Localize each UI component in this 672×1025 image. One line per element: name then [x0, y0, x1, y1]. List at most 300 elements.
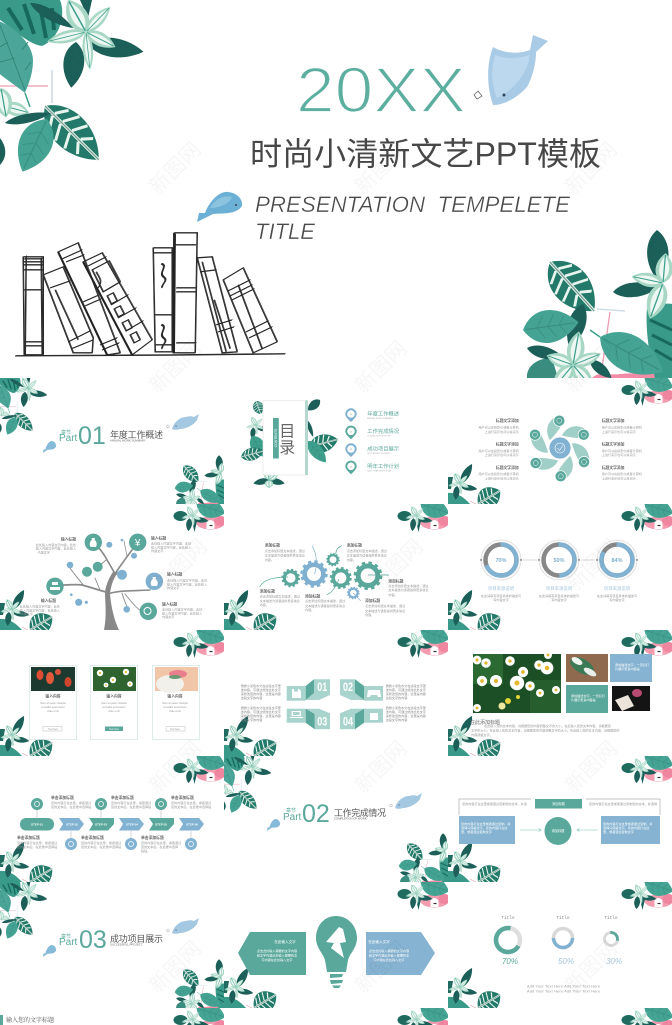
- tile text: 微微小墨色水分在这段文字里: [386, 683, 426, 688]
- leaves: bottom left: [0, 714, 58, 765]
- donut 30%: [604, 916, 622, 966]
- tile text: 来修改您的内容，这里是内容: [241, 691, 281, 696]
- labels: 输入内容文字内容，此处输入: [167, 581, 207, 586]
- ring 84%: [596, 540, 638, 580]
- labels: 输入内容文字内容，此处输入: [162, 610, 202, 615]
- panel: photo collage slide: [448, 630, 672, 756]
- right text column: 上进行演示也可以将演示: [602, 429, 636, 434]
- left teal arrow box: 在此输入文字: [274, 939, 296, 944]
- panel: cropped bottom row slide 2: [398, 1008, 448, 1025]
- labels: 输入标题: [61, 536, 76, 542]
- left teal arrow box: 和文字内容此处输入需要的文: [257, 952, 297, 958]
- panel: 3D numbered tiles slide: [224, 630, 448, 756]
- labels: 文本描述为读者提供更多信息: [305, 603, 345, 608]
- caption lines: [527, 984, 600, 994]
- leaves: bottom left: [0, 840, 58, 891]
- ring captions: 在此请填写项目具体的描述可: [539, 593, 579, 598]
- photo: white tulips: [566, 653, 608, 682]
- timeline text: 您的文本后，在此框中选择粘: [171, 804, 211, 809]
- body copy: [470, 719, 620, 737]
- labels: 内容文字: [38, 549, 50, 554]
- pin item 3: SUCCESSFUL PROJECT: [367, 453, 391, 455]
- center ellipse: 添加标题: [552, 828, 565, 833]
- pin item 1: 01: [350, 414, 353, 416]
- timeline text: 您的内容打在这里，或者通过: [141, 840, 181, 845]
- panel: step timeline slide: [0, 756, 224, 882]
- tile text: 这段文字的内容: [386, 695, 407, 700]
- panel: Part 03 section slide: [0, 882, 224, 1008]
- left teal arrow box: 字内容在此处输入文字: [262, 957, 292, 962]
- card 3: convallis amet lorem: [163, 705, 187, 709]
- leaves: bottom left: [448, 714, 506, 765]
- timeline text: 您的内容打在这里，或者通过: [111, 800, 151, 805]
- timeline steps: STEP 05: [155, 822, 167, 826]
- right blue arrow box: 和文字内容此处输入需要的文: [369, 952, 409, 958]
- pin item 2: COMPLETION OF WORK: [367, 435, 391, 437]
- timeline text: 粘贴。: [141, 848, 150, 853]
- timeline text: 单击添加标题: [171, 795, 194, 800]
- icon: fish large: [390, 793, 422, 809]
- labels: 点击添加标题文本描述，通过: [347, 548, 387, 553]
- panel: progress rings slide: [448, 504, 672, 630]
- section label: 章节: [61, 933, 71, 940]
- right text column: 标题文字添加: [602, 442, 625, 446]
- left text column: 上进行演示也可以将演示: [485, 452, 519, 457]
- contents card: [263, 400, 308, 475]
- icon: light bulb: [316, 916, 357, 988]
- labels: 输入标题: [151, 536, 166, 540]
- labels: 输入内容文字内容，此处输入: [36, 546, 76, 551]
- tile 04: 04: [343, 715, 353, 729]
- slide title: 输入您的文字标题: [6, 1016, 54, 1024]
- right text column: 上进行演示也可以将演示: [602, 452, 636, 457]
- icon: small watercolor fish: [197, 192, 242, 222]
- right text column: 标题文字添加: [602, 418, 625, 423]
- ring captions: 项目来源说明: [604, 585, 631, 592]
- card 2: Test here: [109, 728, 120, 731]
- left text column: 标题文字添加: [496, 418, 519, 423]
- right text column: [602, 418, 643, 480]
- swirl flower chart: [527, 415, 593, 482]
- section title: 工作完成情况: [334, 807, 386, 818]
- timeline text: 您的内容打在这里，或者通过: [171, 800, 211, 805]
- panel: swirl flower diagram slide: [448, 378, 672, 504]
- labels: 文本描述为读者提供更多信息: [265, 552, 305, 558]
- panel: cropped bottom row slide 3: [622, 1008, 672, 1025]
- card 1: Nam at quam volutpat: [40, 701, 66, 705]
- caption lines: Add Your Text Here Add Your Text Here: [527, 984, 600, 988]
- panel: Part 01 section slide: [0, 378, 224, 504]
- leaves: bottom right: [174, 959, 225, 1013]
- tile text: [241, 683, 426, 722]
- pin item 2: [345, 426, 400, 439]
- left text column: 上进行演示也可以将演示: [485, 475, 519, 480]
- labels: 输入标题: [167, 572, 182, 576]
- right blue arrow box: [366, 932, 435, 975]
- donut 30%: 30%: [606, 957, 622, 966]
- donut 50%: [554, 916, 574, 966]
- labels: 内容。: [365, 612, 374, 617]
- pin item 3: 03: [350, 449, 353, 451]
- part word: Part: [59, 937, 78, 948]
- leaves: top right: [174, 621, 228, 658]
- leaves: bottom right: [174, 455, 225, 509]
- card 3: 输入内容: [167, 694, 183, 698]
- leaves: top right: [398, 495, 452, 532]
- pin item 1: ANNUAL WORK SUMMARY: [367, 417, 394, 420]
- tile text: 述内容，可通过修改此处文字: [386, 709, 426, 714]
- leaves: top right: [622, 369, 672, 406]
- leaves: bottom left: [224, 966, 282, 1017]
- panel: gears slide: [224, 504, 448, 630]
- leaves: top right: [174, 495, 228, 532]
- labels: 内容。: [260, 602, 269, 607]
- labels: 点击添加标题文本描述，通过: [265, 548, 305, 553]
- right text column: 上进行演示也可以将演示: [602, 475, 636, 480]
- leaves: top right: [622, 621, 672, 658]
- left blue box: 里，或者通过复制文字: [461, 829, 492, 834]
- title year 20XX: 20XX: [296, 54, 466, 126]
- labels: 输入内容文字内容，此处输入: [20, 607, 60, 612]
- labels: 添加标题: [305, 593, 320, 598]
- left blue box: 您的内容打在这里或者通过复制，并: [461, 821, 510, 826]
- panel: tree diagram slide: [0, 504, 224, 630]
- caption lines: Add Your Text Here Add Your Text Here: [527, 990, 600, 994]
- card 2: 输入内容: [106, 694, 122, 698]
- left text column: 标题文字添加: [496, 465, 519, 470]
- labels: 此处输入内容文字内容，此处: [20, 604, 60, 609]
- leaves: top right: [398, 873, 452, 910]
- icon: fish small: [43, 441, 56, 453]
- card 1: convallis amet lorem: [41, 705, 65, 709]
- heading 目录: 录: [279, 439, 295, 457]
- labels: 此处输入内容文字内容，此处: [162, 607, 202, 612]
- card 1: vitae ut sit: [47, 709, 59, 713]
- main Chinese title: 时尚小清新文艺PPT模板: [250, 136, 601, 172]
- labels: 输入标题: [162, 602, 177, 606]
- tree chart: [46, 534, 163, 630]
- leaves: top right: [622, 495, 672, 532]
- labels: 文本描述为读者提供更多信息: [365, 608, 405, 613]
- labels: 内容。: [347, 557, 356, 562]
- text box: teal: 片展示更多内容是: [571, 697, 596, 702]
- heading 目录: 目: [279, 423, 295, 440]
- leaves: top left: [222, 754, 272, 815]
- watermarks: 新图网: [563, 535, 624, 596]
- timeline text: 您的内容打在这里，或者通过: [17, 840, 57, 845]
- leaves: top left cluster: [0, 0, 145, 178]
- labels: 添加标题: [388, 578, 404, 583]
- tile 01: [287, 679, 330, 701]
- right text column: 标题文字添加: [602, 465, 625, 470]
- pin item 3: [345, 443, 399, 457]
- labels: 内容文字: [162, 614, 174, 619]
- ring captions: 写内容文字: [493, 597, 509, 602]
- icon: fish small: [267, 819, 280, 831]
- timeline text: [17, 795, 211, 853]
- donut 30%: Title: [604, 916, 618, 921]
- right blue arrow box: 点击此处输入需要的文字内容: [369, 948, 409, 953]
- watermarks: 新图网: [351, 737, 412, 798]
- body copy: 文字的大小。在此输入您的文本内容，请根据您的内容调整文字的大小。在此输入您的文本内容，请根据您的: [471, 728, 620, 732]
- watermarks: 新图网: [145, 737, 206, 798]
- watermarks: 新图网: [151, 535, 212, 596]
- watermarks: 新图网: [561, 737, 622, 798]
- tile text: 述内容，可通过修改此处文字: [386, 687, 426, 692]
- center ellipse: [544, 817, 572, 845]
- timeline steps: STEP 04: [126, 822, 138, 826]
- arrows: [520, 828, 598, 832]
- timeline steps: STEP 02: [66, 822, 78, 826]
- pin item 1: [345, 408, 400, 422]
- labels: 文本描述为读者提供更多信息: [347, 552, 387, 558]
- text box: blue: [610, 654, 652, 682]
- donut 50%: Title: [556, 916, 570, 921]
- labels: [260, 542, 429, 617]
- tile text: 来修改您的内容，这里是内容: [241, 713, 281, 718]
- left text column: 上进行演示也可以将演示: [485, 429, 519, 434]
- labels: 内容。: [265, 557, 274, 562]
- timeline text: 您的文本后，在此框中选择粘: [17, 844, 57, 849]
- text box: teal: [566, 685, 608, 713]
- card 2: [90, 666, 138, 740]
- body copy: 在此输入您的文本内容，请根据您的内容调整文字的大小。在此输入您的文本内容，请根据您: [484, 723, 611, 728]
- frame lines and top text: [459, 799, 660, 815]
- pin item 4: NEXT YEAR WORK PLAN: [367, 469, 392, 472]
- ring captions: [481, 585, 637, 602]
- text box: teal: 添加描述文字，一页幻灯: [571, 693, 605, 698]
- pin item 1: 年度工作概述: [367, 410, 400, 418]
- right text column: 用户可以在投影仪或者计算机: [602, 471, 643, 476]
- section label: 章节: [286, 807, 296, 814]
- tile text: 这段文字的内容: [241, 695, 262, 700]
- leaves: top right: [174, 747, 228, 784]
- left text column: 用户可以在投影仪或者计算机: [478, 471, 520, 476]
- tile text: 来修改您的内容，这里是内容: [386, 713, 426, 718]
- section subtitle: ANNUAL WORK SUMMARY: [110, 438, 146, 442]
- right blue arrow box: 在此输入文字: [368, 939, 390, 944]
- ring 70%: 70%: [495, 558, 507, 564]
- heading 目录: [279, 423, 295, 457]
- photo: dark bouquet: [612, 686, 650, 711]
- ring captions: 在此请填写项目具体的描述可: [481, 593, 521, 598]
- watermarks: 新图网: [145, 138, 206, 199]
- part word: Part: [283, 812, 302, 823]
- labels: 文本描述为读者提供更多信息: [260, 598, 300, 603]
- labels: 内容。: [305, 607, 314, 612]
- timeline steps: STEP 01: [31, 822, 43, 826]
- watermarks: 新图网: [367, 535, 428, 596]
- panel: flowchart slide: [448, 756, 672, 882]
- tile 02: [340, 679, 383, 701]
- timeline text: 单击添加标题: [111, 795, 134, 800]
- leaves: bottom left: [224, 714, 282, 765]
- section number: 03: [79, 926, 107, 954]
- body copy: 在此添加标题: [470, 719, 500, 726]
- icon: fish small: [43, 945, 56, 957]
- donut 70%: 70%: [502, 957, 518, 966]
- panel: three cards slide: [0, 630, 224, 756]
- donut 70%: [492, 916, 524, 966]
- panel: cropped bottom row slide 1: [0, 1008, 224, 1025]
- top title box: [535, 799, 582, 808]
- left text column: 标题文字添加: [496, 442, 519, 446]
- labels: 点击添加标题文本描述，通过: [388, 583, 429, 588]
- timeline text: 您的文本后，在此框中选择粘: [51, 804, 91, 809]
- labels: 此处输入内容文字内容，此处: [36, 542, 76, 547]
- card 2: vitae ut sit: [108, 709, 120, 713]
- left text column: [478, 418, 520, 480]
- leaves: bottom left: [448, 462, 506, 513]
- ring 84%: 84%: [611, 558, 623, 564]
- leaves: bottom left: [448, 966, 506, 1017]
- watermarks: 新图网: [351, 138, 412, 199]
- timeline text: 您的文本后，在此框中选择粘: [81, 844, 121, 849]
- pin item 3: 成功项目展示: [367, 445, 399, 453]
- tile text: 微微小墨色水分在这段文字里: [241, 705, 281, 710]
- watermarks: 新图网: [351, 337, 412, 398]
- labels: 内容文字: [21, 611, 33, 616]
- tree chart: ¥: [134, 538, 141, 549]
- panel: Part 02 section slide: [224, 756, 448, 882]
- timeline text: 单击添加标题: [17, 835, 40, 840]
- labels: 文本描述为读者提供更多信息: [388, 587, 429, 592]
- watermarks: 新图网: [145, 337, 206, 398]
- section number: 02: [302, 800, 330, 828]
- timeline text: 您的内容打在这里，或者通过: [51, 800, 91, 805]
- leaves: top left: [0, 376, 48, 437]
- section title: 年度工作概述: [110, 429, 163, 440]
- subtitle line one: PRESENTATION TEMPELETE: [255, 192, 570, 217]
- card 1: Test here: [48, 728, 59, 731]
- left teal arrow box: 点击此处输入需要的文字内容: [257, 948, 297, 953]
- icon: fish large: [166, 918, 199, 934]
- tile text: 这段文字的内容: [386, 717, 407, 722]
- body copy: 内容调整文字。: [471, 732, 493, 737]
- leaves: top right: [398, 621, 452, 658]
- watermarks: 新图网: [561, 138, 622, 199]
- top title box: 添加标题: [552, 801, 566, 806]
- section label: 章节: [61, 429, 71, 436]
- tile text: 微微小墨色水分在这段文字里: [386, 705, 426, 710]
- icon: fish large: [166, 414, 199, 430]
- tile text: 微微小墨色水分在这段文字里: [241, 683, 281, 688]
- tile 03: [287, 709, 330, 729]
- tile text: 来修改您的内容，这里是内容: [386, 691, 426, 696]
- card 2: Nam at quam volutpat: [101, 701, 127, 705]
- illustration: sketched books: [15, 232, 286, 356]
- title accent bar: [0, 1015, 3, 1025]
- tile text: 述内容，可通过修改此处文字: [241, 687, 281, 692]
- leaves: bottom left: [0, 588, 58, 639]
- panel: donut charts slide: [448, 882, 672, 1008]
- labels: 输入标题: [41, 598, 56, 603]
- right blue box: 您的内容打在这里或者通过复制，并: [603, 821, 652, 826]
- timeline text: 您的文本后，在此框中选择粘: [111, 804, 151, 809]
- timeline text: 单击添加标题: [51, 795, 74, 800]
- labels: 此处输入内容文字内容，此处: [151, 541, 191, 546]
- timeline nodes: [31, 798, 197, 850]
- right blue box: [601, 816, 660, 844]
- section subtitle: COMPLETION OF WORK: [334, 816, 367, 820]
- ring captions: 写内容文字: [551, 597, 567, 602]
- photo: daisies: [473, 651, 561, 713]
- left text column: 用户可以在投影仪或者计算机: [478, 424, 520, 430]
- card 3: vitae ut sit: [169, 709, 181, 713]
- leaves: bottom right cluster: [521, 230, 672, 393]
- text box: blue: 添加描述文字，一页幻灯: [615, 662, 649, 667]
- pin item 2: 工作完成情况: [367, 427, 400, 435]
- panel: contents slide: [241, 399, 400, 488]
- card 3: Test here: [170, 728, 181, 731]
- left teal arrow box: [238, 932, 306, 975]
- ring 70%: [480, 540, 522, 580]
- labels: 点击添加标题文本描述，通过: [305, 598, 345, 603]
- leaves: bottom right: [398, 833, 449, 887]
- ring 50%: [538, 540, 580, 580]
- timeline steps: STEP 03: [95, 822, 107, 826]
- vertical band with CONTENTS: CONTENTS: [274, 428, 278, 447]
- part word: Part: [59, 433, 78, 444]
- labels: 添加标题: [365, 598, 380, 603]
- left blue box: [459, 816, 515, 844]
- tile text: 这段文字的内容: [241, 717, 262, 722]
- labels: 内容文字: [167, 585, 179, 590]
- timeline text: 单击添加标题: [81, 835, 104, 840]
- leaves: top right: [622, 873, 672, 910]
- tile 03: 03: [317, 715, 328, 729]
- watermarks: 新图网: [561, 337, 622, 398]
- timeline text: 单击添加标题: [141, 835, 164, 840]
- labels: 此处输入内容文字内容，此处: [167, 578, 207, 583]
- labels: 添加标题: [347, 542, 362, 547]
- connectors: [523, 559, 595, 561]
- watermarks: 新图网: [145, 937, 206, 998]
- labels: 内容。: [388, 592, 398, 597]
- watermarks: [145, 138, 624, 998]
- leaves: bottom left: [224, 588, 282, 639]
- tile 04: [340, 709, 383, 729]
- leaves: top right: [622, 747, 672, 784]
- donut 70%: Title: [501, 916, 515, 921]
- left blue box: 选择只保留文字。您的内容打在这: [461, 825, 507, 830]
- tile 02: 02: [343, 680, 353, 694]
- tile text: 述内容，可通过修改此处文字: [241, 709, 281, 714]
- section title: 成功项目展示: [110, 933, 163, 944]
- card 1: 输入内容: [45, 694, 61, 698]
- labels: 内容文字: [151, 548, 163, 553]
- ring 50%: 50%: [553, 558, 565, 564]
- right text column: 用户可以在投影仪或者计算机: [602, 448, 643, 453]
- leaves: top right: [174, 999, 228, 1025]
- ring captions: 在此请填写项目具体的描述可: [597, 593, 637, 598]
- leaves: bottom left: [448, 840, 506, 891]
- labels: 添加标题: [265, 542, 280, 547]
- pin item 4: 04: [350, 466, 353, 468]
- labels: [20, 536, 207, 619]
- watermarks: 新图网: [351, 937, 412, 998]
- left text column: 用户可以在投影仪或者计算机: [478, 448, 520, 453]
- ring captions: 项目来源说明: [488, 585, 515, 592]
- card 3: Nam at quam volutpat: [162, 701, 188, 705]
- card 2: convallis amet lorem: [102, 705, 126, 709]
- pin item 2: 02: [350, 431, 353, 433]
- ring captions: 写内容文字: [609, 597, 625, 602]
- gears chart: [260, 546, 389, 601]
- frame lines and top text: 您的内容打在这里或者通过复制您的文本，并选择: [589, 801, 658, 806]
- timeline steps: [20, 818, 204, 830]
- right blue box: 里，或者通过复制文字: [603, 829, 634, 834]
